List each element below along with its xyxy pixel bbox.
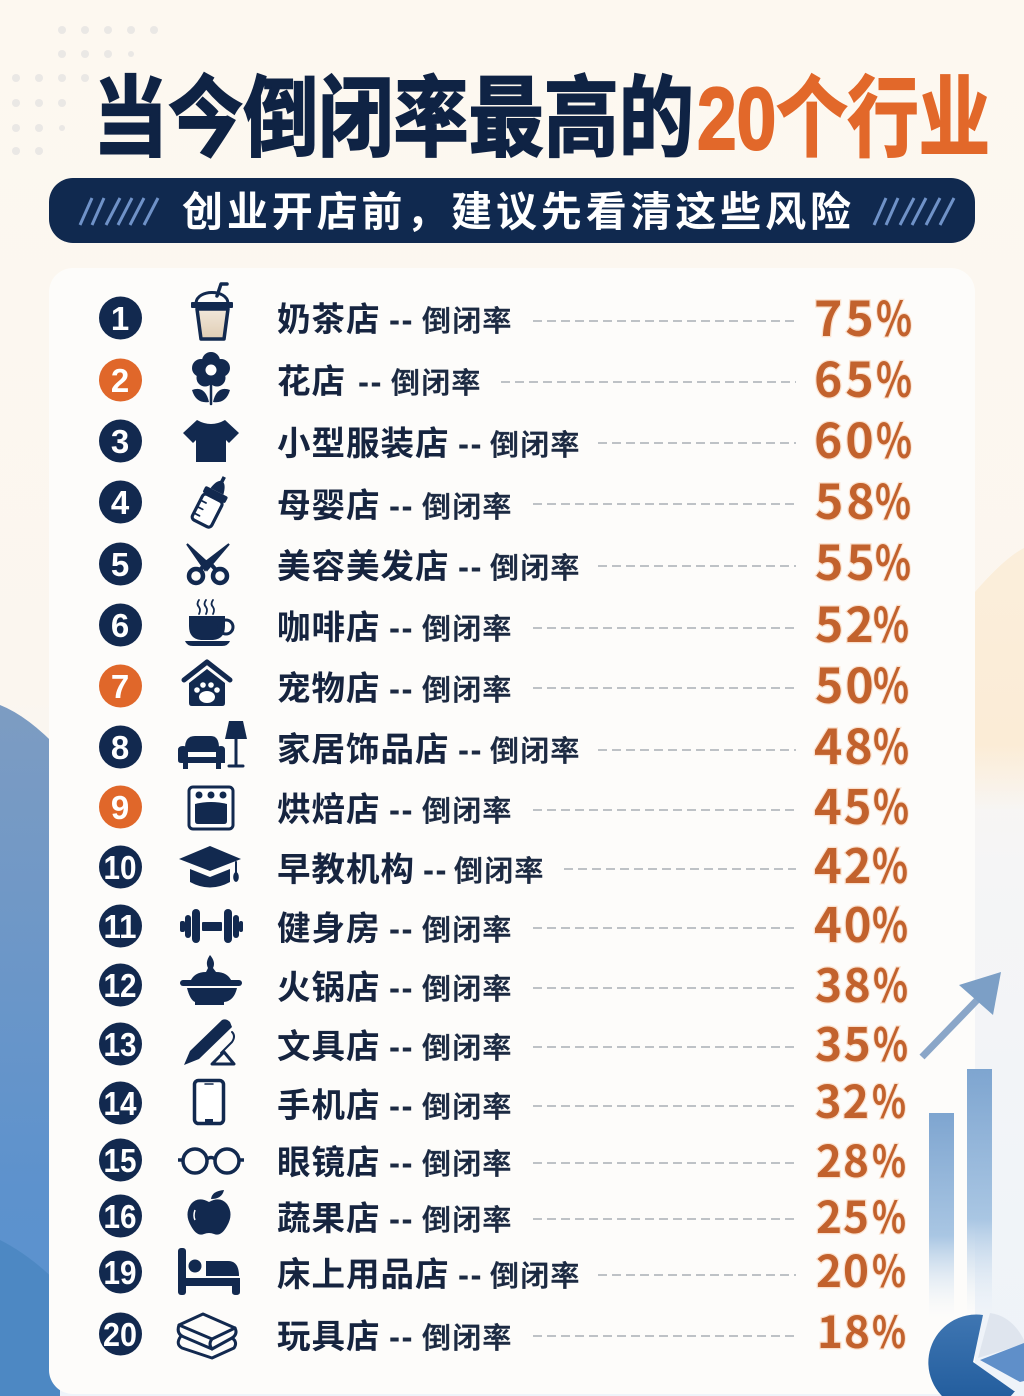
row 20	[99, 1297, 906, 1361]
row name: 烘焙店	[277, 792, 380, 829]
row name: 倒闭率	[490, 1260, 581, 1293]
row name: 倒闭率	[422, 914, 513, 947]
rank badge: 9	[111, 789, 129, 826]
peach background shape	[960, 548, 1024, 810]
row 7	[99, 647, 909, 717]
icon: oven	[189, 787, 233, 829]
row name: 倒闭率	[422, 1148, 513, 1181]
icon: pen and ruler	[184, 1019, 234, 1065]
percent: %	[873, 950, 908, 1016]
percent: %	[873, 647, 909, 717]
percent: 42	[814, 828, 873, 897]
banner left stripes	[80, 198, 158, 225]
arrow: rising trend	[922, 972, 1001, 1057]
icon: sofa and lamp	[178, 721, 247, 769]
row 6	[99, 586, 909, 656]
rank badge: 7	[111, 668, 129, 705]
percent: 60	[814, 402, 877, 472]
banner right stripes	[874, 198, 954, 225]
percent: 28	[816, 1126, 870, 1190]
blue background wave	[0, 705, 60, 1396]
row name: --	[458, 425, 483, 462]
row 13	[99, 1009, 908, 1075]
percent: %	[873, 769, 909, 838]
row 14	[99, 1066, 906, 1131]
row 1	[99, 280, 912, 350]
percent: 25	[816, 1182, 870, 1246]
row name: 倒闭率	[422, 674, 513, 707]
row name: --	[389, 1144, 414, 1181]
row name: 床上用品店	[277, 1257, 450, 1294]
row name: 奶茶店	[277, 302, 380, 339]
panel: list card	[49, 268, 975, 1394]
percent	[814, 769, 909, 838]
percent	[814, 402, 912, 472]
percent	[817, 1297, 906, 1361]
icon: hot pot	[180, 955, 242, 1005]
row 8	[99, 708, 909, 778]
percent	[815, 1009, 908, 1075]
percent: 38	[815, 950, 872, 1016]
subtitle text: 创业开店前，建议先看清这些风险	[182, 189, 851, 235]
row name: 倒闭率	[422, 795, 513, 828]
percent: %	[875, 524, 911, 594]
row name: 倒闭率	[422, 1032, 513, 1065]
percent: 50	[815, 647, 876, 717]
row name: --	[389, 910, 414, 947]
row name: 文具店	[277, 1029, 380, 1066]
percent	[814, 828, 908, 897]
rank badge: 15	[104, 1142, 136, 1179]
icon: milk tea	[191, 284, 233, 339]
icon: bed	[178, 1248, 240, 1295]
rank badge: 6	[111, 607, 129, 644]
percent: %	[873, 1009, 908, 1075]
title dark part: 当今倒闭率最高的	[93, 69, 694, 168]
rank badge	[99, 480, 142, 524]
percent	[815, 950, 908, 1016]
percent: 75	[814, 280, 877, 350]
icon: dumbbell	[180, 909, 243, 943]
percent: 18	[817, 1297, 871, 1361]
row 2	[99, 341, 912, 411]
percent	[814, 280, 912, 350]
rank badge	[99, 604, 142, 646]
row name: --	[389, 487, 414, 524]
percent	[814, 708, 909, 778]
row name: 倒闭率	[490, 735, 581, 768]
percent: %	[872, 887, 908, 956]
percent: 48	[814, 708, 875, 778]
percent: %	[872, 1126, 906, 1190]
percent: %	[876, 402, 912, 472]
percent: %	[872, 1182, 906, 1246]
row name: 咖啡店	[277, 610, 380, 647]
percent	[814, 887, 908, 956]
row name: 倒闭率	[490, 429, 581, 462]
bar chart decoration	[929, 1069, 992, 1319]
rank badge	[99, 786, 142, 828]
row name: --	[358, 363, 383, 400]
decorative dot grid	[12, 26, 158, 155]
percent	[816, 1126, 906, 1190]
icon: phone	[194, 1080, 224, 1124]
row name: 倒闭率	[454, 855, 545, 888]
percent: %	[873, 708, 909, 778]
percent: 35	[815, 1009, 872, 1075]
row name: 倒闭率	[422, 1204, 513, 1237]
row name: --	[389, 969, 414, 1006]
percent	[815, 524, 911, 594]
rank badge: 12	[104, 967, 136, 1004]
percent	[815, 1066, 906, 1131]
row 11	[99, 887, 908, 956]
row name: 蔬果店	[277, 1201, 380, 1238]
percent: %	[875, 463, 911, 533]
row name: 宠物店	[277, 671, 380, 708]
row name: 健身房	[277, 911, 380, 948]
rank badge: 4	[111, 484, 130, 521]
row name: 家居饰品店	[277, 732, 450, 769]
rank badge: 2	[111, 362, 129, 399]
row name: --	[458, 548, 483, 585]
rank badge	[99, 904, 142, 948]
icon: coffee cup	[185, 600, 233, 646]
rank badge	[99, 726, 142, 768]
row 5	[99, 524, 911, 594]
row name: --	[458, 731, 483, 768]
rank badge: 13	[104, 1026, 136, 1063]
percent: 58	[815, 463, 878, 533]
icon: graduation cap	[179, 846, 241, 888]
rank badge: 16	[104, 1198, 136, 1235]
percent	[816, 1236, 906, 1300]
icon: flower	[192, 352, 230, 404]
rank badge: 20	[103, 1316, 137, 1353]
row name: 倒闭率	[422, 1091, 513, 1124]
percent: 52	[815, 586, 876, 656]
pie chart decoration	[928, 1313, 1024, 1396]
row 12	[99, 950, 908, 1016]
row name: --	[389, 791, 414, 828]
row 10	[99, 828, 908, 897]
row name: 倒闭率	[422, 613, 513, 646]
row name: --	[389, 670, 414, 707]
icon: scissors	[187, 544, 229, 583]
percent: 65	[814, 341, 877, 411]
row name: 美容美发店	[277, 549, 450, 586]
percent	[814, 341, 912, 411]
row name: 小型服装店	[277, 426, 450, 463]
rank badge: 8	[111, 729, 129, 766]
percent: 40	[814, 887, 873, 956]
row name: 母婴店	[277, 488, 380, 525]
rank badge: 11	[104, 908, 136, 945]
rank badge	[99, 664, 142, 708]
title	[93, 69, 990, 168]
icon: pet house	[184, 662, 230, 706]
row name: --	[389, 1200, 414, 1237]
percent	[816, 1182, 906, 1246]
row name: --	[389, 609, 414, 646]
percent: %	[872, 828, 908, 897]
row 19	[99, 1236, 906, 1300]
percent: %	[872, 1297, 906, 1361]
row name: --	[389, 1318, 414, 1355]
rank badge	[99, 420, 142, 462]
percent: %	[876, 280, 912, 350]
row 9	[99, 769, 909, 838]
percent: %	[876, 341, 912, 411]
rank badge: 10	[104, 849, 136, 886]
row name: 倒闭率	[422, 305, 513, 338]
percent	[815, 647, 909, 717]
percent	[815, 463, 911, 533]
row name: 花店	[277, 364, 346, 401]
percent: 32	[815, 1066, 870, 1131]
row name: --	[389, 1028, 414, 1065]
row 16	[99, 1182, 906, 1246]
row name: --	[389, 301, 414, 338]
row name: 倒闭率	[391, 367, 482, 400]
row name: 早教机构	[277, 852, 415, 889]
row 15	[99, 1126, 906, 1190]
rank badge	[99, 542, 142, 586]
icon: baby bottle	[189, 471, 236, 529]
row name: 倒闭率	[422, 491, 513, 524]
icon: t-shirt	[183, 420, 239, 462]
percent	[815, 586, 909, 656]
row name: 倒闭率	[422, 973, 513, 1006]
rank badge: 1	[111, 300, 129, 337]
subtitle banner	[49, 178, 975, 243]
row name: 手机店	[277, 1088, 380, 1125]
rank badge: 5	[111, 546, 129, 583]
row name: 火锅店	[277, 970, 380, 1007]
row name: 倒闭率	[422, 1322, 513, 1355]
icon: apple	[188, 1190, 230, 1235]
row 4	[99, 463, 911, 533]
row name: 玩具店	[277, 1319, 380, 1356]
rank badge	[99, 296, 142, 340]
icon: folded towels	[178, 1314, 236, 1358]
icon: glasses	[178, 1149, 244, 1173]
rank badge: 19	[104, 1254, 136, 1291]
percent: %	[872, 1236, 906, 1300]
percent: 20	[816, 1236, 870, 1300]
row 3	[99, 402, 912, 472]
rank badge: 3	[111, 423, 129, 460]
rank badge	[99, 358, 142, 402]
percent: %	[873, 586, 909, 656]
row name: --	[423, 851, 448, 888]
percent: %	[872, 1066, 906, 1131]
row name: --	[389, 1087, 414, 1124]
row name: 眼镜店	[277, 1145, 380, 1182]
row name: --	[458, 1256, 483, 1293]
percent: 45	[814, 769, 873, 838]
percent: 55	[815, 524, 878, 594]
rank badge: 14	[104, 1085, 137, 1122]
row name: 倒闭率	[490, 552, 581, 585]
